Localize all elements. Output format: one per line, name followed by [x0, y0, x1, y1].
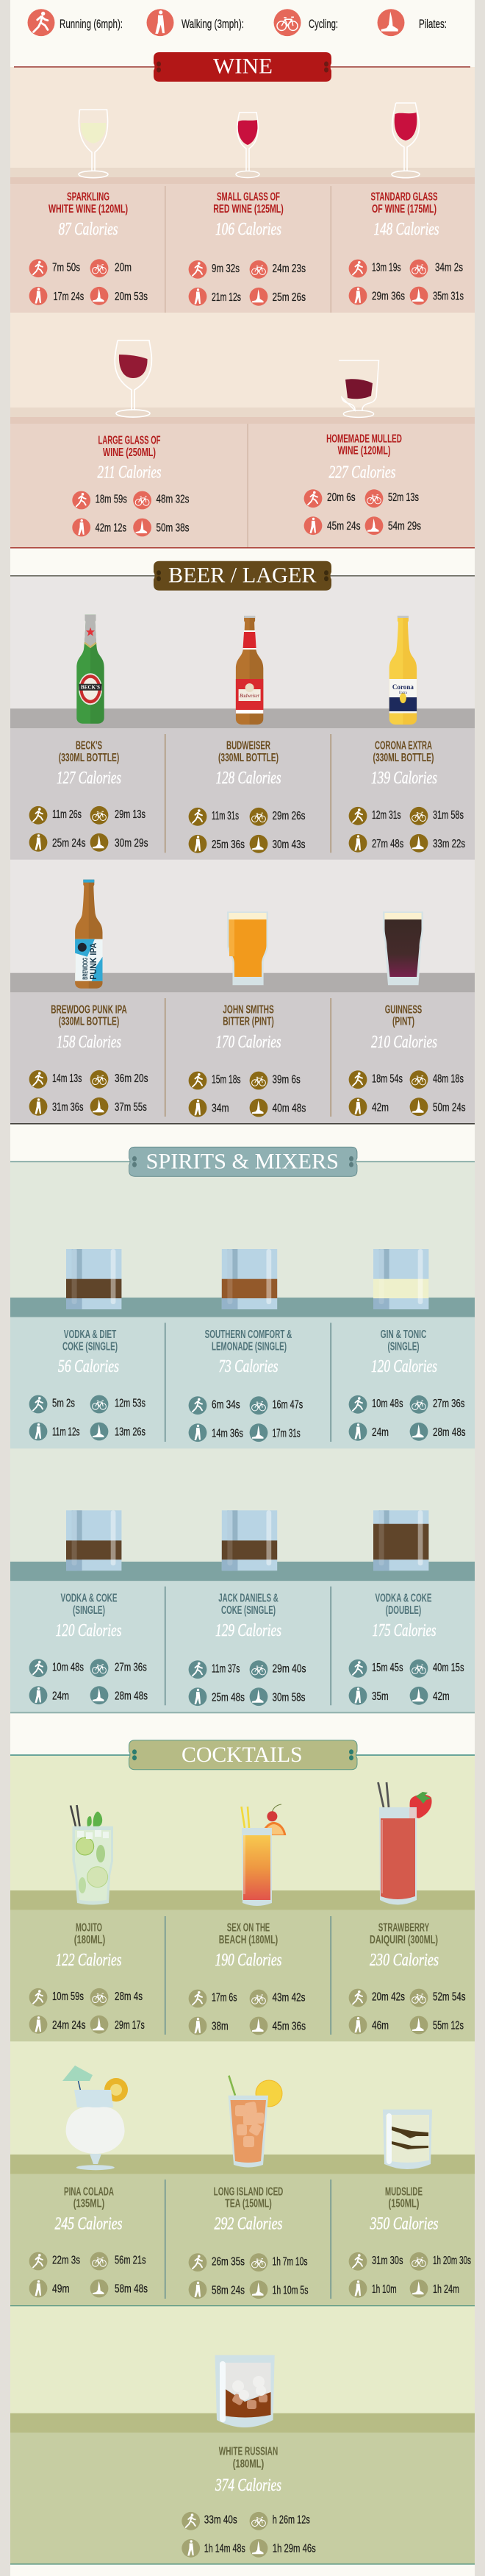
stats: 28m 48s [433, 1426, 466, 1439]
illustration: strawberry daiquiri glass [378, 1782, 432, 1905]
illustration: Corona bottle: Extra [399, 691, 408, 695]
stats: 40m 48s [272, 1103, 306, 1115]
name: BREWDOG PUNK IPA [51, 1003, 127, 1016]
stats: 35m 31s [433, 290, 464, 303]
calories: 129 Calories [215, 1621, 281, 1640]
stats [189, 2253, 309, 2299]
name [375, 1593, 432, 1617]
legend: exercise key: Walking (3mph): [182, 17, 244, 31]
name: WHITE RUSSIAN [219, 2446, 278, 2458]
name: COKE (SINGLE) [221, 1604, 276, 1617]
panel: beer and lager section [10, 561, 475, 1124]
name: LONG ISLAND ICED [214, 2185, 283, 2198]
panel: spirits and mixers section [10, 1147, 475, 1713]
stats: 13m 19s [372, 262, 401, 274]
item: large glass of wine [72, 341, 190, 536]
stats: 42m [372, 1101, 389, 1114]
illustration: Punk IPA bottle [75, 880, 103, 989]
stats: 11m 26s [52, 808, 82, 821]
stats [29, 1395, 146, 1440]
item: white russian [182, 2355, 316, 2558]
stats: 12m 31s [372, 809, 401, 822]
stats: 33m 22s [433, 838, 465, 850]
stats [349, 260, 464, 305]
stats: 20m [115, 261, 132, 274]
stats: 25m 36s [212, 839, 245, 851]
stats: 36m 20s [115, 1072, 148, 1085]
name: WINE (250ML) [103, 446, 156, 459]
name: LEMONADE (SINGLE) [212, 1340, 287, 1353]
name: GUINNESS [385, 1003, 422, 1016]
name [60, 1593, 118, 1617]
stats: 5m 2s [52, 1398, 75, 1410]
name: BUDWEISER [226, 740, 270, 752]
heading: cocktails banner [129, 1740, 357, 1770]
stats: 20m 53s [115, 291, 148, 303]
illustration: Beck's bottle [76, 615, 104, 724]
calories: 120 Calories [56, 1621, 122, 1640]
stats: 30m 29s [115, 837, 148, 850]
illustration: Corona bottle: Corona [392, 683, 414, 691]
stats: 11m 37s [212, 1662, 240, 1675]
name: JOHN SMITHS [223, 1003, 274, 1016]
calories: 127 Calories [57, 769, 121, 788]
stats: 10m 59s [52, 1990, 84, 2003]
name: STANDARD GLASS [370, 191, 438, 204]
illustration: tumbler [222, 1510, 277, 1570]
stats [349, 1395, 466, 1441]
stats: 11m 31s [212, 810, 239, 822]
name: VODKA & DIET [64, 1328, 116, 1341]
stats: 29m 13s [115, 808, 146, 821]
stats: 24m [372, 1426, 389, 1439]
name [213, 191, 284, 216]
stats: 1h 7m 10s [272, 2255, 307, 2268]
stats: 49m [52, 2283, 70, 2296]
calories: 210 Calories [371, 1033, 437, 1052]
calories: 292 Calories [215, 2215, 282, 2234]
item: John Smiths bitter [189, 911, 306, 1117]
stats: 24m 24s [52, 2019, 85, 2032]
stats [189, 260, 306, 306]
illustration: mojito glass [71, 1805, 113, 1905]
name: (SINGLE) [73, 1604, 105, 1617]
stats: 28m 48s [115, 1690, 148, 1702]
panel: cocktails section [10, 1740, 475, 2565]
calories: 56 Calories [58, 1357, 119, 1376]
name [214, 2185, 283, 2210]
name [62, 1328, 118, 1353]
name: SMALL GLASS OF [217, 191, 280, 204]
stats: 48m 32s [156, 493, 190, 506]
calories: 245 Calories [54, 2215, 122, 2234]
item: strawberry daiquiri [349, 1782, 466, 2034]
name: (180ML) [233, 2458, 264, 2470]
calories: 139 Calories [371, 769, 437, 788]
calories: 374 Calories [215, 2476, 281, 2495]
stats: 25m 48s [212, 1691, 245, 1704]
item: Corona Extra [349, 616, 465, 853]
item: mojito [29, 1805, 145, 2034]
illustration: tumbler [373, 1249, 428, 1309]
name: (PINT) [392, 1016, 414, 1028]
stats: 33m 40s [204, 2514, 237, 2526]
stats: 17m 6s [212, 1992, 237, 2004]
stats: 27m 36s [433, 1398, 464, 1410]
name: (135ML) [73, 2198, 104, 2210]
stats: 20m 42s [372, 1991, 405, 2004]
stats: 6m 34s [212, 1398, 240, 1411]
illustration: mulled wine glass [339, 360, 379, 417]
illustration: Beck's bottle: BECK'S [81, 685, 100, 691]
name: (180ML) [74, 1934, 105, 1946]
stats: 21m 12s [212, 291, 241, 304]
stats: 30m 43s [272, 839, 306, 851]
stats: h 26m 12s [273, 2514, 310, 2526]
stats: 25m 26s [272, 291, 306, 304]
item: sparkling white wine [29, 110, 148, 305]
stats: 14m 36s [212, 1427, 243, 1440]
stats: 43m 42s [272, 1992, 306, 2004]
illustration: Corona bottle [389, 616, 417, 725]
stats: 54m 29s [388, 520, 421, 533]
name: LARGE GLASS OF [98, 434, 161, 446]
heading: cocktails banner: COCKTAILS [182, 1743, 303, 1767]
calories: 170 Calories [216, 1033, 281, 1052]
stats: 48m 18s [433, 1072, 464, 1085]
name [98, 434, 161, 459]
name: WINE (120ML) [338, 445, 391, 458]
calories: 211 Calories [97, 463, 162, 482]
stats: 39m 6s [272, 1074, 301, 1086]
stats: 52m 13s [388, 491, 419, 504]
name: STRAWBERRY [378, 1922, 429, 1935]
name: (DOUBLE) [386, 1604, 421, 1617]
illustration: white wine glass [79, 110, 108, 178]
calories: 227 Calories [329, 463, 395, 482]
heading: beer banner: BEER / LAGER [168, 563, 316, 588]
stats [29, 806, 148, 852]
stats: 1h 10m [372, 2283, 397, 2296]
name: (SINGLE) [388, 1340, 419, 1353]
stats: 9m 32s [212, 263, 240, 275]
name [48, 191, 128, 216]
stats: 50m 38s [156, 522, 190, 534]
stats: 26m 35s [212, 2255, 245, 2268]
name: MUDSLIDE [385, 2185, 423, 2198]
heading: beer banner [154, 561, 331, 591]
item: gin and tonic [349, 1249, 466, 1441]
calories: 190 Calories [215, 1951, 282, 1970]
stats: 29m 26s [272, 810, 306, 822]
stats: 18m 59s [96, 493, 127, 506]
name: WHITE WINE (120ML) [48, 203, 128, 216]
stats [189, 1396, 303, 1442]
stats: 28m 4s [115, 1990, 143, 2003]
name: CORONA EXTRA [375, 740, 432, 752]
name [51, 1003, 127, 1028]
item: mudslide [349, 2110, 471, 2298]
stats: 20m 6s [327, 491, 356, 504]
calories: 122 Calories [56, 1951, 122, 1970]
stats: 22m 3s [52, 2255, 80, 2267]
name: OF WINE (175ML) [372, 203, 436, 216]
item: Beck's [29, 615, 148, 852]
item: vodka and coke double [349, 1510, 464, 1705]
stats: 14m 13s [52, 1072, 82, 1085]
name: MOJITO [76, 1922, 102, 1935]
stats: 7m 50s [52, 261, 80, 274]
stats: 34m 2s [435, 262, 463, 274]
calories: 158 Calories [57, 1033, 121, 1052]
illustration: Punk IPA bottle: BREWDOG [82, 958, 89, 980]
stats: 31m 58s [433, 809, 464, 822]
item: southern comfort and lemonade [189, 1249, 303, 1442]
stats [189, 1990, 306, 2035]
stats: 27m 36s [115, 1661, 147, 1673]
name [385, 2185, 423, 2210]
item: standard glass of wine [349, 103, 464, 305]
name: (330ML BOTTLE) [218, 752, 279, 764]
legend: exercise key: Running (6mph): [60, 17, 123, 31]
stats: 10m 48s [52, 1661, 84, 1673]
illustration: long island iced tea glass [229, 2076, 282, 2167]
name [385, 1003, 422, 1028]
stats: 15m 18s [212, 1074, 241, 1086]
stats: 24m 23s [272, 263, 306, 275]
calories: 106 Calories [215, 220, 281, 239]
name: VODKA & COKE [375, 1593, 432, 1605]
name [218, 740, 279, 764]
name: HOMEMADE MULLED [326, 433, 402, 446]
name [219, 1922, 278, 1946]
stats: 29m 40s [272, 1662, 306, 1675]
stats: 52m 54s [433, 1991, 466, 2004]
item: vodka and coke single [29, 1510, 148, 1704]
item: Guinness [349, 911, 466, 1116]
name: DAIQUIRI (300ML) [370, 1934, 438, 1946]
illustration: pint of stout [383, 911, 423, 985]
name: GIN & TONIC [381, 1328, 427, 1341]
stats: 30m 58s [272, 1691, 306, 1704]
illustration: mudslide glass [383, 2110, 432, 2169]
illustration: tumbler [222, 1249, 277, 1309]
name: (330ML BOTTLE) [59, 1016, 119, 1028]
stats: 42m 12s [96, 522, 126, 534]
item: long island iced tea [189, 2076, 309, 2299]
stats: 58m 24s [212, 2284, 245, 2296]
item: Budweiser [189, 616, 306, 853]
stats: 1h 10m 5s [272, 2284, 309, 2296]
stats: 12m 53s [115, 1398, 146, 1410]
illustration: pint of bitter [227, 911, 268, 985]
calories: 230 Calories [370, 1951, 439, 1970]
stats [29, 1070, 148, 1116]
stats: 40m 15s [433, 1662, 464, 1674]
stats [29, 259, 148, 305]
stats: 17m 24s [53, 291, 84, 303]
stats [189, 808, 306, 853]
heading: spirits banner [129, 1147, 357, 1176]
item: jack daniels and coke [189, 1510, 306, 1706]
name: PINA COLADA [64, 2185, 114, 2198]
illustration: Punk IPA bottle: PUNK IPA [88, 942, 98, 980]
calories: 87 Calories [59, 220, 118, 239]
stats: 46m [372, 2020, 389, 2032]
stats [349, 1989, 466, 2034]
name [74, 1922, 105, 1946]
illustration: Budweiser bottle [236, 616, 263, 725]
stats [349, 807, 465, 853]
stats: 11m 12s [52, 1426, 79, 1439]
name [64, 2185, 114, 2210]
stats: 31m 30s [372, 2255, 403, 2267]
stats: 34m [212, 1103, 229, 1115]
heading: wine banner [154, 52, 331, 82]
name: VODKA & COKE [60, 1593, 118, 1605]
illustration: pina colada glass [62, 2066, 128, 2170]
legend: exercise key: Cycling: [309, 17, 338, 31]
stats: 27m 48s [372, 838, 403, 850]
name [205, 1328, 292, 1353]
stats: 31m 36s [52, 1101, 84, 1114]
stats: 58m 48s [115, 2283, 148, 2296]
panel: wine section [10, 52, 475, 549]
name: (330ML BOTTLE) [373, 752, 434, 764]
calories: 175 Calories [372, 1621, 436, 1640]
stats: 42m [433, 1690, 450, 1703]
name [326, 433, 402, 458]
stats: 13m 26s [115, 1426, 146, 1439]
illustration: Budweiser bottle: Budweiser [240, 693, 259, 699]
item: small glass of red wine [189, 113, 306, 306]
stats: 15m 45s [372, 1662, 403, 1674]
stats [189, 1072, 306, 1117]
name: JACK DANIELS & [218, 1593, 279, 1605]
illustration: small wine glass [236, 113, 259, 178]
stats [304, 489, 421, 535]
name [370, 191, 438, 216]
name [59, 740, 119, 764]
item: sex on the beach [189, 1804, 306, 2035]
stats: 25m 24s [52, 837, 85, 850]
calories: 73 Calories [219, 1357, 278, 1376]
stats: 56m 21s [115, 2255, 146, 2267]
stats [349, 1659, 464, 1705]
stats: 50m 24s [433, 1101, 466, 1114]
item: Brewdog Punk IPA [29, 880, 148, 1116]
stats: 1h 29m 46s [273, 2542, 316, 2555]
stats: 17m 31s [272, 1427, 301, 1440]
name: (330ML BOTTLE) [59, 752, 119, 764]
stats [349, 2252, 471, 2298]
name: SPARKLING [67, 191, 109, 204]
item: homemade mulled wine [304, 360, 421, 535]
name [381, 1328, 427, 1353]
illustration: tumbler [373, 1510, 428, 1570]
name: RED WINE (125ML) [213, 203, 284, 216]
stats: 1h 24m [433, 2283, 459, 2296]
illustration: tumbler [66, 1510, 121, 1570]
stats [189, 1660, 306, 1706]
name [373, 740, 434, 764]
illustration: large wine glass [115, 341, 151, 417]
stats [29, 1988, 145, 2034]
stats: 45m 36s [272, 2021, 306, 2033]
item: pina colada [29, 2066, 148, 2297]
stats: 1h 14m 48s [204, 2542, 245, 2555]
name [219, 2446, 278, 2470]
illustration: white russian glass [215, 2355, 275, 2427]
stats: 24m [52, 1690, 69, 1702]
illustration: sex on the beach glass [241, 1804, 286, 1906]
stats: 16m 47s [272, 1398, 303, 1411]
name: BITTER (PINT) [223, 1016, 274, 1028]
stats: 55m 12s [433, 2020, 464, 2032]
name: BEACH (180ML) [219, 1934, 278, 1946]
stats [29, 2252, 148, 2297]
stats [349, 1070, 466, 1116]
stats [29, 1659, 148, 1704]
stats: 10m 48s [372, 1398, 403, 1410]
name: BECK'S [76, 740, 102, 752]
stats: 29m 17s [115, 2019, 145, 2032]
heading: spirits banner: SPIRITS & MIXERS [146, 1149, 339, 1173]
name: SEX ON THE [227, 1922, 270, 1935]
stats: 18m 54s [372, 1072, 403, 1085]
calories: 148 Calories [373, 220, 439, 239]
name [223, 1003, 274, 1028]
name: SOUTHERN COMFORT & [205, 1328, 292, 1341]
illustration: tumbler [66, 1249, 121, 1309]
calories: 120 Calories [371, 1357, 437, 1376]
name: TEA (150ML) [225, 2198, 272, 2210]
stats [72, 491, 190, 536]
legend: exercise key [28, 9, 447, 36]
name: (150ML) [388, 2198, 419, 2210]
calories: 128 Calories [216, 769, 281, 788]
item: vodka and diet coke [29, 1249, 146, 1440]
stats: 38m [212, 2021, 229, 2033]
name [218, 1593, 279, 1617]
stats [182, 2512, 316, 2558]
stats: 35m [372, 1690, 389, 1703]
illustration: standard wine glass [392, 103, 420, 178]
calories: 350 Calories [370, 2215, 438, 2234]
stats: 37m 55s [115, 1101, 147, 1114]
heading: wine banner: WINE [213, 54, 273, 78]
stats: 45m 24s [327, 520, 360, 533]
name [370, 1922, 438, 1946]
name: COKE (SINGLE) [62, 1340, 118, 1353]
stats: 29m 36s [372, 290, 405, 303]
legend: exercise key: Pilates: [419, 17, 447, 31]
